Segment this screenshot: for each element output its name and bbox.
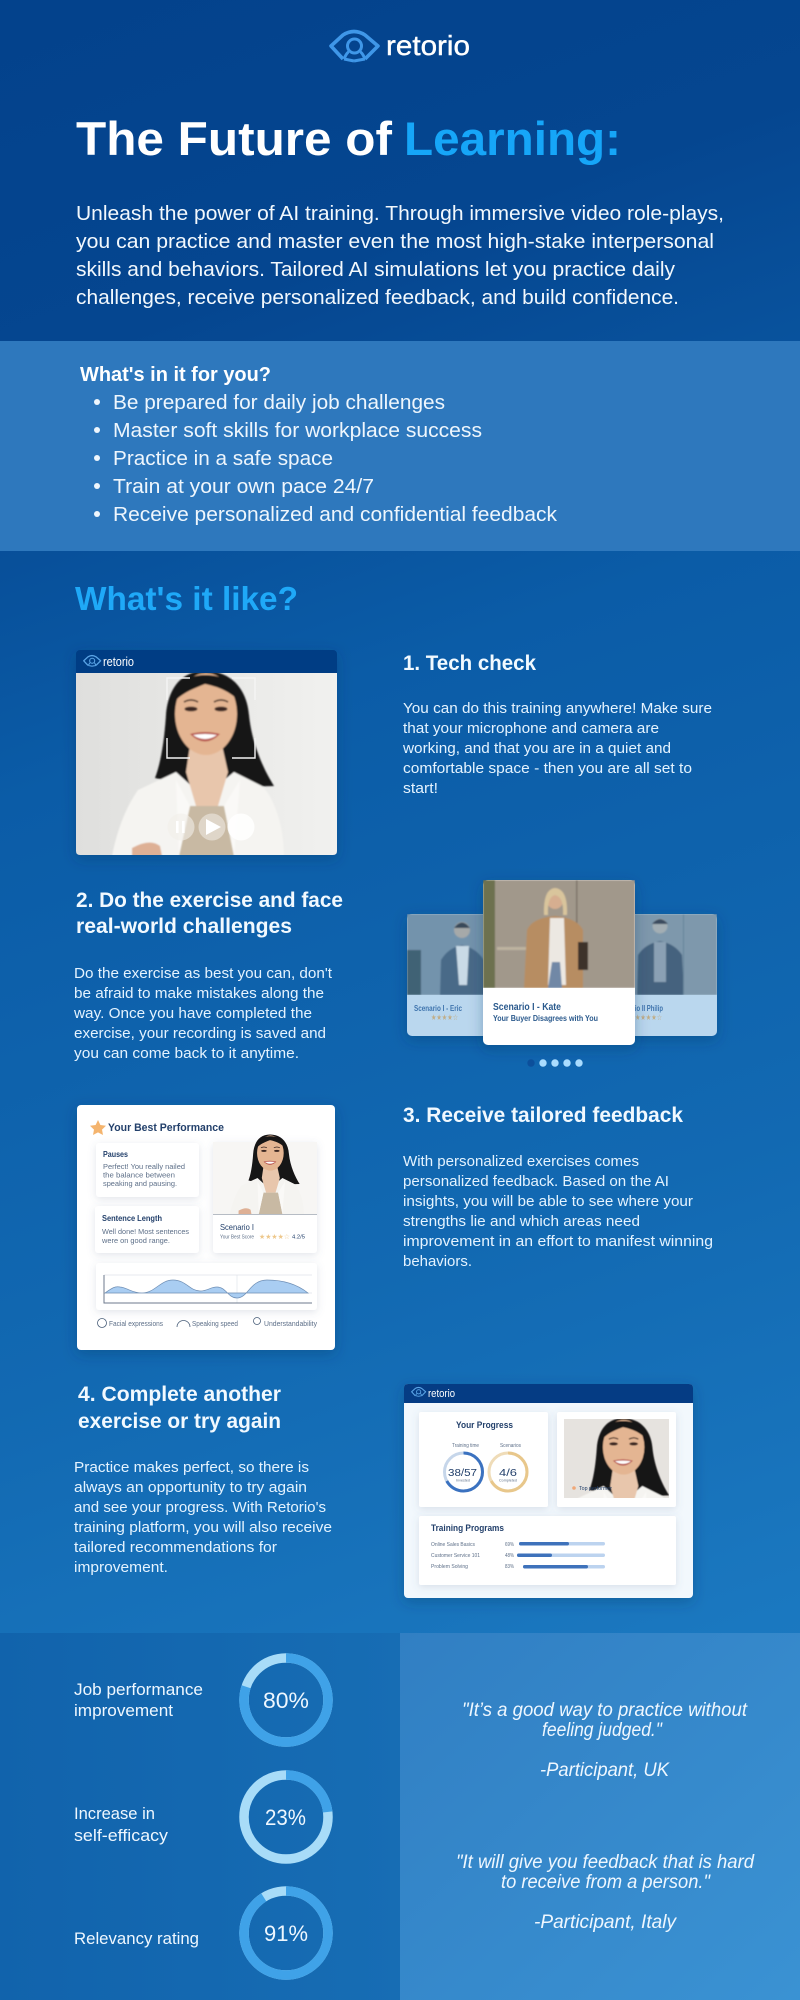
step 4 text: always an opportunity to try again (74, 1479, 307, 1496)
ring: training time: 38/57 (448, 1468, 478, 1479)
face tracking bracket (167, 678, 255, 758)
progress screenshot (404, 1384, 693, 1598)
ring: training time: Invested (456, 1478, 470, 1482)
intro paragraph: Unleash the power of AI training. Through immersive video role-plays, (76, 202, 724, 225)
chart legend (98, 1318, 317, 1328)
progress bars (431, 1542, 605, 1570)
benefit list (94, 392, 558, 526)
heading: complete another exercise: 4. Complete another (78, 1383, 281, 1406)
stat: increase in self-efficacy (74, 1775, 328, 1859)
heading: do the exercise (76, 889, 343, 938)
heading: do the exercise: 2. Do the exercise and face (76, 889, 343, 912)
step 1 text: working, and that you are in a quiet and (402, 740, 671, 757)
scenario card: Philip: ★★★★☆ (635, 1013, 662, 1022)
stat: relevancy rating: 91% (264, 1921, 308, 1946)
step 4 text: improvement. (74, 1559, 168, 1576)
ring: scenarios: 4/6 (499, 1468, 518, 1479)
carousel dots (527, 1059, 583, 1067)
quote: Italy participant: "It will give you feedback that is hard (456, 1852, 755, 1873)
logo: retorio (331, 30, 470, 61)
card: pauses: speaking and pausing. (103, 1179, 177, 1188)
title: The Future of (76, 112, 392, 165)
scenario card: Eric: ★★★★☆ (431, 1013, 458, 1022)
heading: tech check: 1. Tech check (403, 652, 536, 675)
step 2 text: you can come back to it anytime. (74, 1045, 299, 1062)
card: training programs: Training Programs (431, 1523, 504, 1534)
scenario carousel (407, 880, 717, 1067)
icon: retorio eye (331, 32, 378, 61)
scenario card: Kate: Your Buyer Disagrees with You (493, 1014, 598, 1023)
card: scenario with photo: Scenario I (220, 1222, 254, 1232)
step 2 text: Do the exercise as best you can, don't (74, 965, 333, 982)
card text: Scenario I - Kate (493, 1002, 561, 1013)
progress bars: Online Sales Basics (431, 1542, 475, 1548)
step 3 text: behaviors. (403, 1253, 472, 1270)
scenario card: Eric (407, 914, 497, 1036)
step 1 text: comfortable space - then you are all set to (403, 760, 692, 777)
title (76, 112, 621, 165)
card: your progress: Training time (452, 1443, 479, 1449)
scenario card: Philip: Scenario II Philip (615, 1004, 663, 1013)
card: pauses: Pauses (103, 1150, 128, 1159)
card: training programs (419, 1516, 676, 1585)
step 2 text: way. Once you have completed the (73, 1005, 312, 1022)
card: your progress (419, 1412, 548, 1507)
small retorio logo (84, 655, 134, 669)
card: sentence length (95, 1206, 199, 1253)
stat: relevancy rating (74, 1891, 328, 1975)
heading: what's it like: What's it like? (75, 580, 298, 617)
heading: complete another exercise (78, 1383, 281, 1433)
step 1 text: You can do this training anywhere! Make sure (403, 700, 712, 717)
benefit list: Master soft skills for workplace success (113, 420, 482, 442)
card: sentence length: Sentence Length (102, 1214, 162, 1223)
card: scenario with photo: ★★★★☆ (259, 1233, 290, 1241)
stat: job performance improvement: Job performance (74, 1680, 203, 1699)
card: sentence length: Well done! Most sentences (102, 1227, 189, 1236)
stat: increase in self-efficacy: 23% (265, 1805, 306, 1830)
chart: performance curve (96, 1263, 317, 1310)
feedback screenshot (77, 1105, 335, 1350)
progress bars: Problem Solving (431, 1564, 468, 1570)
chart legend: Facial expressions (109, 1319, 163, 1328)
quote: UK participant: -Participant, UK (540, 1760, 670, 1781)
stat: relevancy rating: Relevancy rating (74, 1929, 199, 1948)
card: your progress: Scenarios (500, 1443, 521, 1449)
progress bars: 83% (505, 1564, 514, 1570)
step 2 text: exercise, your recording is saved and (74, 1025, 326, 1042)
step 4 text: tailored recommendations for (74, 1539, 277, 1556)
step 1 text: that your microphone and camera are (403, 720, 659, 737)
small retorio logo: retorio (428, 1388, 455, 1400)
progress bars: Customer Service 101 (431, 1553, 480, 1559)
card: pauses: the balance between (103, 1170, 175, 1180)
quote: UK participant: feeling judged." (542, 1720, 663, 1741)
chart legend: Speaking speed (192, 1319, 238, 1328)
intro paragraph: you can practice and master even the most high-stake interpersonal (76, 230, 714, 253)
intro paragraph (76, 202, 724, 309)
step 4 text (74, 1383, 332, 1576)
benefit list: Train at your own pace 24/7 (113, 476, 374, 498)
chart legend: Understandability (264, 1319, 317, 1328)
intro paragraph: challenges, receive personalized feedback, and build confidence. (76, 286, 679, 309)
panel: what's in it for you (0, 341, 800, 551)
stat: job performance improvement (74, 1658, 328, 1742)
panel: statistics (0, 1633, 400, 2000)
step 3 text (403, 1104, 713, 1270)
photo: smiling woman (112, 671, 284, 856)
step 2 text (73, 889, 343, 1062)
title: Learning: (404, 112, 621, 165)
scenario card: Philip (635, 914, 720, 1043)
stat: increase in self-efficacy: Increase in (74, 1804, 155, 1823)
step 3 text: With personalized exercises comes (403, 1153, 639, 1170)
step 3 text: strengths lie and which areas need (403, 1213, 640, 1230)
small retorio logo (412, 1387, 455, 1400)
card: scenario with photo: Your Best Score (220, 1234, 254, 1240)
heading: receive tailored feedback: 3. Receive tailored feedback (403, 1104, 683, 1127)
card: pauses (96, 1143, 199, 1197)
progress bars: 69% (505, 1542, 514, 1548)
step 3 text: personalized feedback. Based on the AI (403, 1173, 669, 1190)
ring: training time (444, 1453, 482, 1491)
card: scenario with photo: 4.2/5 (292, 1234, 305, 1240)
quote: Italy participant (456, 1852, 755, 1933)
small retorio logo: retorio (103, 655, 134, 669)
video controls (168, 814, 254, 840)
card: learner photo: Top performer (579, 1486, 612, 1492)
heading: do the exercise: real-world challenges (76, 915, 292, 938)
card: your progress: Your Progress (456, 1420, 513, 1431)
intro paragraph: skills and behaviors. Tailored AI simulations let you practice daily (76, 258, 676, 281)
step 3 text: improvement in an effort to manifest winning (403, 1233, 713, 1250)
step 3 text: insights, you will be able to see where your (403, 1193, 693, 1210)
quote: UK participant: "It’s a good way to practice without (462, 1700, 748, 1721)
stat: job performance improvement: improvement (74, 1701, 173, 1720)
benefit list: Receive personalized and confidential feedback (113, 504, 558, 526)
step 1 text: start! (403, 780, 438, 797)
quote: Italy participant: -Participant, Italy (534, 1912, 678, 1933)
step 4 text: and see your progress. With Retorio's (74, 1499, 326, 1516)
heading: your best performance: Your Best Performance (108, 1122, 224, 1134)
quote: Italy participant: to receive from a person." (501, 1872, 711, 1893)
card: learner photo (555, 1412, 678, 1511)
benefit list: Practice in a safe space (113, 448, 333, 470)
step 4 text: Practice makes perfect, so there is (74, 1459, 309, 1476)
heading: complete another exercise: exercise or try again (78, 1410, 281, 1433)
icon: star (90, 1120, 106, 1135)
card: pauses: Perfect! You really nailed (103, 1162, 185, 1171)
heading: what's in it for you: What's in it for you? (80, 364, 271, 386)
progress bars: 48% (505, 1553, 514, 1559)
benefit list: Be prepared for daily job challenges (113, 392, 445, 414)
panel: participant quotes (400, 1633, 800, 2000)
scenario card: Kate (483, 880, 635, 1045)
step 1 text (402, 652, 712, 797)
ring: scenarios (489, 1453, 527, 1491)
ring: scenarios: Completed (499, 1478, 517, 1482)
step 2 text: be afraid to make mistakes along the (74, 985, 324, 1002)
stat: increase in self-efficacy: self-efficacy (74, 1826, 169, 1845)
screenshot: video recording (76, 650, 337, 856)
stat: job performance improvement: 80% (263, 1688, 309, 1713)
logo: retorio: retorio (386, 30, 470, 61)
scenario card: Eric: Scenario I - Eric (414, 1004, 462, 1013)
card: scenario with photo (213, 1135, 317, 1253)
card: sentence length: were on good range. (101, 1236, 170, 1245)
quote: UK participant (462, 1700, 748, 1781)
step 4 text: training platform, you will also receive (74, 1519, 332, 1536)
